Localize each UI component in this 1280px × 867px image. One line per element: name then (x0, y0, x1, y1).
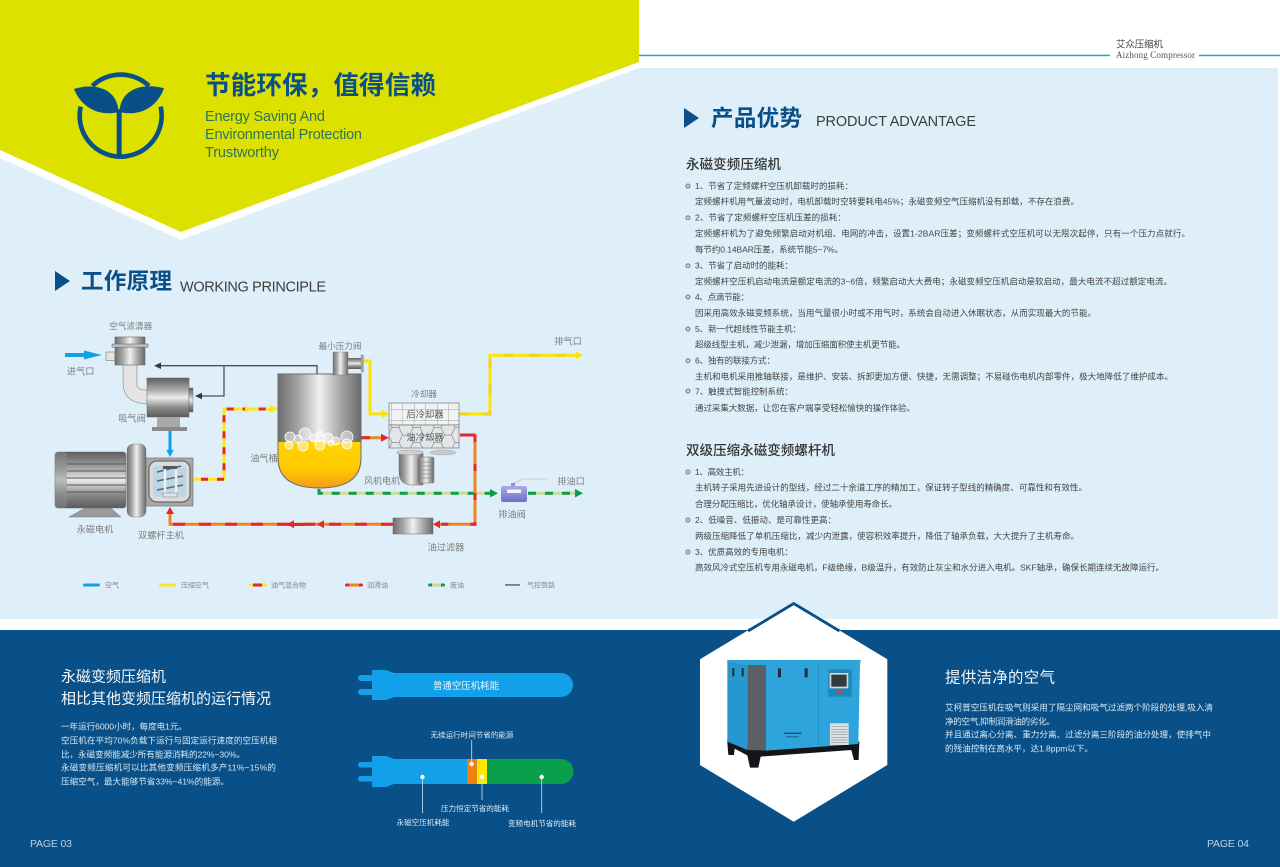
heading: working principle (55, 269, 326, 296)
text block: permanent magnet compressor: 定频螺杆机为了避免频繁启动对机组、电网的冲击，设置1-2BAR压差；变频螺杆式空压机可以无限次起停，只有一个压力点就行。 (695, 228, 1190, 238)
text block: permanent magnet compressor: 通过采集大数据，让您在客户端享受轻松愉快的操作体验。 (695, 403, 915, 413)
permanent magnet motor (55, 444, 146, 517)
diagram labels: 最小压力阀 (319, 340, 361, 351)
diagram labels: 油过滤器 (428, 542, 464, 552)
plug chart: permanent magnet compressor: 永磁空压机耗能 (396, 817, 450, 827)
light blue page background (0, 68, 1278, 619)
text block: permanent magnet compressor: 主机和电机采用推轴联接，是维护、安装、拆卸更加方便、快捷，无需调整；不易碰伤电机内部零件，极大地降低了维护成本。 (695, 372, 1173, 382)
text block: permanent magnet compressor: 6、独有的联接方式： (695, 356, 775, 366)
compressed air lines (364, 352, 583, 418)
diagram labels: 进气口 (67, 366, 94, 376)
text block: permanent magnet compressor: 定频螺杆机用气量波动时，电机卸载时空转要耗电45%；永磁变频空气压缩机没有卸载，不存在浪费。 (695, 197, 1079, 207)
diagram labels: 油气桶 (250, 452, 278, 464)
text block: permanent magnet compressor: 5、新一代超线性节能主机： (695, 324, 801, 334)
diagram labels: 空气滤清器 (109, 320, 153, 331)
page number right: PAGE 04 (1207, 838, 1249, 850)
text block: two-stage compressor: 2、低噪音、低振动、是可靠性更高： (695, 515, 836, 525)
diagram labels: 排油口 (557, 476, 585, 486)
page number left: PAGE 03 (30, 838, 72, 850)
legend: 压缩空气 (181, 580, 209, 590)
banner english subtitle: Environmental Protection (205, 127, 362, 143)
legend: 气控管路 (527, 580, 555, 590)
white strip under lime banner (0, 0, 639, 240)
air intake arrow (65, 350, 102, 360)
cooler (389, 403, 459, 448)
text block: clean air: 并且通过离心分离、重力分离、过滤分离三阶段的油分处理，使排气中 (945, 728, 1211, 739)
text block: two-stage compressor: 1、高效主机： (695, 467, 749, 477)
diagram labels: 永磁电机 (77, 524, 113, 534)
text block: clean air: 艾柯普空压机在吸气则采用了隔尘网和吸气过滤两个阶段的处理,吸入清 (945, 701, 1213, 712)
text block: clean air: 的残油控制在高水平，达1.8ppm以下。 (945, 742, 1093, 753)
air arrow into compressor (166, 431, 174, 457)
drain valve (501, 479, 547, 502)
text block: comparison: 压缩空气，最大能够节省33%~41%的能源。 (61, 775, 229, 786)
text block: two-stage compressor: 3、优质高效的专用电机： (695, 547, 793, 557)
text block: permanent magnet compressor: 3、节省了启动时的能耗： (695, 261, 793, 271)
text block: comparison (61, 668, 277, 786)
text block: comparison: 相比其他变频压缩机的运行情况 (61, 690, 271, 708)
heading: product advantage (684, 106, 976, 131)
diagram labels: 双螺杆主机 (138, 530, 184, 540)
text block: permanent magnet compressor: 4、点滴节能： (695, 292, 749, 302)
text block: comparison: 一年运行6000小时，每度电1元。 (61, 720, 187, 731)
text block: two-stage compressor: 双级压缩永磁变频螺杆机 (686, 442, 836, 458)
legend (83, 580, 555, 590)
banner english subtitle (205, 109, 362, 161)
text block: clean air (945, 668, 1213, 753)
text block: two-stage compressor: 高效风冷式空压机专用永磁电机，F级绝缘，B级温升，有效防止灰尘和水分进入电机。SKF轴承，确保长期连续无故障运行。 (695, 563, 1164, 573)
text block: two-stage compressor (686, 442, 1164, 573)
text block: two-stage compressor: 合理分配压缩比，优化轴承设计，使轴承使用寿命长。 (695, 499, 897, 509)
text block: permanent magnet compressor: 7、触摸式智能控制系统： (695, 387, 793, 397)
top right brand label (639, 38, 1280, 60)
text block: permanent magnet compressor: 定频螺杆空压机启动电流是额定电流的3~6倍，频繁启动大大费电；永磁变频空压机启动是软启动，最大电流不超过额定电流。 (695, 277, 1172, 287)
text block: comparison: 空压机在平均70%负载下运行与固定运行速度的空压机相 (61, 734, 277, 745)
plug chart: permanent magnet compressor: 压力恒定节省的能耗 (441, 803, 509, 813)
plug chart: permanent magnet compressor (358, 730, 576, 828)
air filter and elbow pipe (106, 337, 148, 397)
heading: working principle: WORKING PRINCIPLE (180, 280, 326, 296)
diagram labels: 冷却器 (411, 388, 437, 399)
diagram labels: 排油阀 (498, 508, 526, 520)
lubricating oil return line (166, 435, 475, 528)
plug chart: ordinary compressor: 普通空压机耗能 (433, 680, 500, 691)
text block: clean air: 提供洁净的空气 (945, 668, 1055, 686)
heading: working principle: 工作原理 (81, 269, 172, 294)
plug chart: permanent magnet compressor: 无续运行时间节省的能源 (430, 730, 514, 740)
oil-air tank (278, 374, 361, 488)
text block: permanent magnet compressor: 超级线型主机，减少泄漏，增加压缩面积使主机更节能。 (695, 340, 905, 350)
text block: two-stage compressor: 主机转子采用先进设计的型线，经过二十余道工序的精加工，保证转子型线的精确度、可靠性和有效性。 (695, 483, 1087, 493)
legend: 空气 (105, 580, 119, 590)
lime banner (0, 0, 639, 232)
cooler: 油冷却器 (406, 432, 444, 442)
text block: comparison: 比，永磁变频能减少所有能源消耗的22%~30%。 (61, 748, 245, 759)
minimum pressure valve (333, 352, 364, 375)
text block: permanent magnet compressor: 因采用高效永磁变频系统，当用气量很小时或不用气时，系统会自动进入休眠状态，从而实现最大的节能。 (695, 308, 1096, 318)
twin screw head (146, 458, 193, 506)
top right brand label: 艾众压缩机 (1116, 38, 1163, 50)
text block: permanent magnet compressor (686, 156, 1190, 413)
text block: permanent magnet compressor: 2、节省了定频螺杆空压机压差的损耗： (695, 213, 846, 223)
control air lines (154, 362, 317, 399)
banner english subtitle: Energy Saving And (205, 109, 325, 125)
legend: 润滑油 (367, 580, 388, 590)
compressed oil-air line (194, 405, 279, 479)
text block: comparison: 永磁变频压缩机 (61, 668, 166, 686)
diagram labels: 吸气阀 (118, 412, 146, 424)
banner english subtitle: Trustworthy (205, 145, 280, 161)
text block: clean air: 净的空气,抑制润滑油的劣化。 (945, 715, 1055, 726)
text block: comparison: 永磁变频压缩机可以比其他变频压缩机多产11%~15%的 (61, 761, 276, 772)
text block: permanent magnet compressor: 永磁变频压缩机 (686, 156, 782, 172)
oil to cooler line (361, 434, 389, 442)
diagram labels (67, 320, 585, 552)
legend: 废油 (450, 580, 464, 590)
suction valve (147, 378, 193, 431)
cooler: 后冷却器 (406, 408, 444, 420)
text block: permanent magnet compressor: 1、节省了定频螺杆空压机卸载时的损耗： (695, 181, 853, 191)
hexagon with compressor photo (700, 603, 887, 822)
diagram labels: 风机电机 (364, 475, 400, 486)
plug chart: ordinary compressor (358, 670, 573, 700)
top right brand label: Aizhong Compressor (1116, 50, 1195, 60)
legend: 油气混合物 (271, 580, 306, 590)
plug chart: permanent magnet compressor: 变频电机节省的能耗 (508, 818, 576, 828)
diagram labels: 排气口 (554, 336, 582, 346)
text block: permanent magnet compressor: 每节约0.14BAR压差，系统节能5~7%。 (695, 244, 843, 254)
banner title: 节能环保，值得信赖 (205, 71, 436, 100)
heading: product advantage: 产品优势 (711, 106, 802, 131)
heading: product advantage: PRODUCT ADVANTAGE (816, 114, 976, 130)
oil filter (393, 518, 433, 534)
text block: two-stage compressor: 两级压缩降低了单机压缩比，减少内泄露，使容积效率提升，降低了轴承负载，大大提升了主机寿命。 (695, 531, 1079, 541)
waste oil line (319, 489, 583, 498)
logo: leaf in ring (74, 75, 164, 157)
bottom navy band (0, 630, 1280, 867)
flow diagram (55, 320, 585, 552)
compressor machine (727, 660, 861, 768)
fan and motor (396, 450, 456, 485)
